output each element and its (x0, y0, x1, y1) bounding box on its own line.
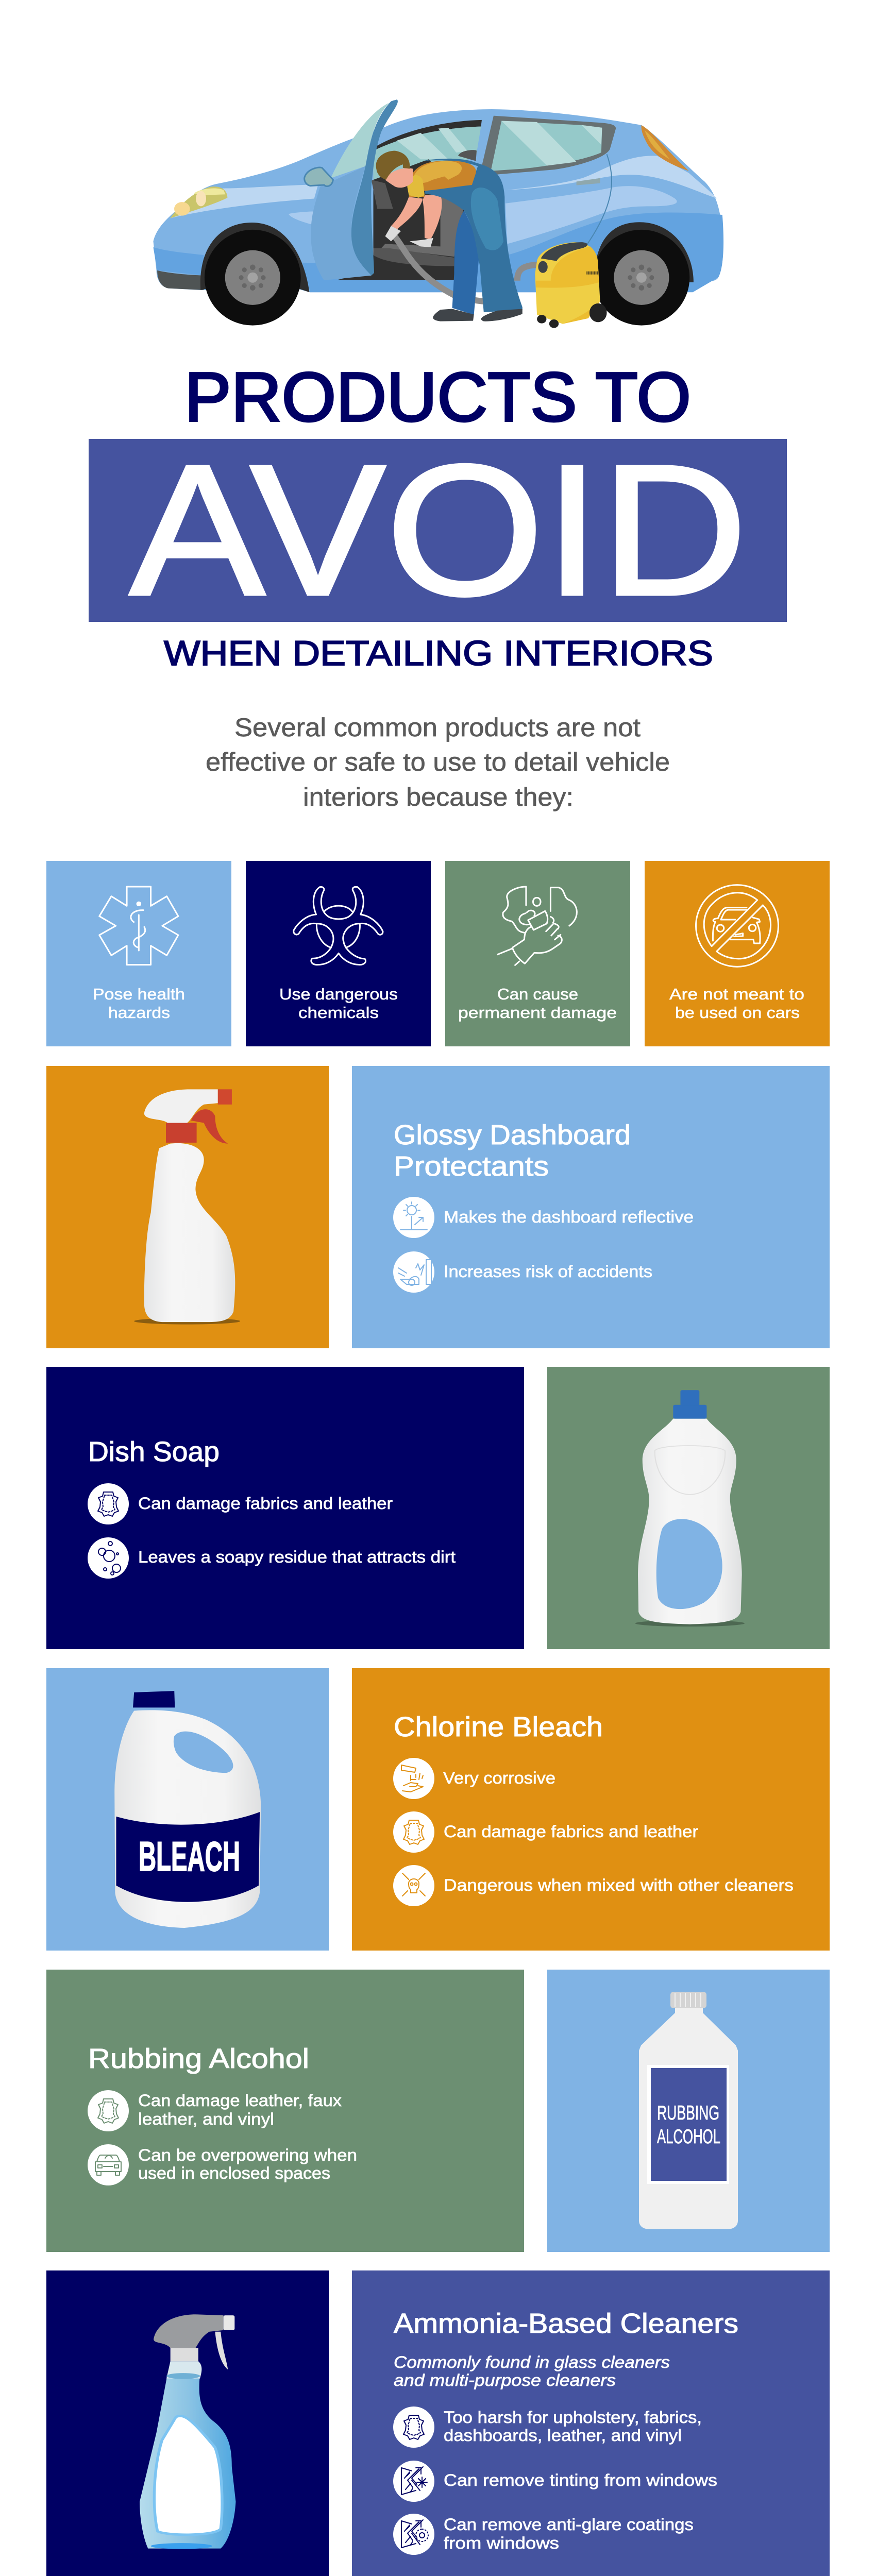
item: too harsh: dashboards, leather, and vinyl (444, 2426, 682, 2445)
item: leather damage (88, 2090, 342, 2131)
panel: pose health hazards (46, 861, 231, 1046)
intro text: interiors because they: (303, 783, 574, 811)
panel: rubbing alcohol (46, 1970, 524, 2252)
panel: ammonia image (46, 2270, 329, 2576)
item: anti-glare (393, 2514, 694, 2555)
panel: glossy dashboard image (46, 1066, 329, 1348)
yellow vacuum (535, 242, 607, 328)
item: leather damage: Can damage leather, faux (138, 2091, 342, 2110)
bottle: blue glass cleaner (140, 2314, 235, 2549)
illustration: worker vacuuming car interior (153, 99, 723, 328)
panel: glossy dashboard protectants: Glossy Dashboard (394, 1120, 631, 1150)
item: fabrics and leather (393, 1811, 698, 1853)
item: reflective (393, 1197, 694, 1238)
item: soapy residue (88, 1537, 456, 1579)
icon: no cars sign (696, 885, 778, 967)
panel: not meant for cars: Are not meant to (669, 985, 804, 1003)
note: where found: Commonly found in glass cleaners (394, 2353, 670, 2371)
panel: glossy dashboard protectants (352, 1066, 830, 1348)
item: fabrics and leather: Can damage fabrics and leather (444, 1822, 698, 1841)
item: accidents (393, 1251, 652, 1293)
panel: rubbing alcohol image (547, 1970, 830, 2252)
note: where found: and multi-purpose cleaners (394, 2371, 616, 2389)
item: anti-glare: from windows (444, 2534, 559, 2552)
item: soapy residue: Leaves a soapy residue that attracts dirt (138, 1548, 456, 1566)
item: mixing danger: Dangerous when mixed with other cleaners (444, 1876, 794, 1894)
item: overpowering: used in enclosed spaces (138, 2164, 330, 2182)
item: fabrics and leather (88, 1483, 393, 1524)
banner: avoid: AVOID (129, 426, 748, 634)
wheels (200, 222, 694, 292)
item: tinting: Can remove tinting from windows (444, 2471, 717, 2489)
intro text: Several common products are not (234, 713, 641, 742)
panel: ammonia-based cleaners (352, 2270, 830, 2576)
panel: dish soap (46, 1367, 524, 1649)
panel: use dangerous chemicals: Use dangerous (279, 985, 398, 1003)
icon: biohazard (294, 887, 383, 965)
panel: not meant for cars (645, 861, 830, 1046)
item: mixing danger (393, 1865, 794, 1906)
panel: chlorine bleach (352, 1668, 830, 1951)
car body (153, 109, 723, 292)
item: corrosive (393, 1758, 555, 1799)
panel: pose health hazards: hazards (108, 1004, 170, 1022)
panel: glossy dashboard protectants: Protectants (394, 1151, 549, 1182)
subheading: when detailing interiors: WHEN DETAILING INTERIORS (164, 634, 713, 673)
bottle: dish soap (635, 1390, 745, 1626)
bottle: bleach jug (114, 1691, 261, 1928)
item: overpowering: Can be overpowering when (138, 2146, 357, 2164)
panel: can cause permanent damage: permanent damage (458, 1004, 617, 1022)
bottle: rubbing alcohol: ALCOHOL (657, 2126, 720, 2148)
item: accidents: Increases risk of accidents (444, 1262, 652, 1281)
note: where found (394, 2353, 670, 2389)
panel: can cause permanent damage: Can cause (497, 985, 578, 1003)
item: fabrics and leather: Can damage fabrics and leather (138, 1494, 393, 1513)
headlight and tail light (170, 187, 227, 218)
bottle: bleach jug: BLEACH (139, 1834, 240, 1880)
item: anti-glare: Can remove anti-glare coatings (444, 2515, 694, 2534)
item: corrosive: Very corrosive (443, 1769, 555, 1787)
panel: dish soap image (547, 1367, 830, 1649)
bottle: rubbing alcohol (639, 1992, 738, 2229)
item: leather damage: leather, and vinyl (138, 2110, 274, 2128)
bottle: red trigger spray (134, 1089, 240, 1325)
icon: star of life (99, 887, 178, 965)
icon: hand scrubbing (498, 887, 577, 965)
item: too harsh: Too harsh for upholstery, fabrics, (444, 2408, 702, 2427)
panel: dish soap: Dish Soap (88, 1436, 220, 1467)
panel: not meant for cars: be used on cars (675, 1004, 800, 1022)
item: tinting (393, 2461, 717, 2502)
panel: use dangerous chemicals (246, 861, 431, 1046)
panel: pose health hazards: Pose health (93, 985, 185, 1003)
panel: rubbing alcohol: Rubbing Alcohol (88, 2043, 309, 2074)
panel: use dangerous chemicals: chemicals (298, 1004, 379, 1022)
heading: products to: PRODUCTS TO (184, 358, 691, 436)
panel: bleach image (46, 1668, 329, 1951)
panel: chlorine bleach: Chlorine Bleach (394, 1711, 603, 1742)
intro text: effective or safe to use to detail vehicle (206, 748, 670, 776)
panel: can cause permanent damage (445, 861, 630, 1046)
open car door (311, 166, 372, 280)
vacuum hose (394, 235, 498, 301)
item: reflective: Makes the dashboard reflective (444, 1208, 694, 1226)
bottle: rubbing alcohol: RUBBING (657, 2102, 719, 2124)
item: too harsh (393, 2406, 702, 2448)
item: overpowering (88, 2144, 357, 2185)
panel: ammonia-based cleaners: Ammonia-Based Cleaners (394, 2308, 738, 2339)
intro text (206, 713, 670, 811)
worker (376, 151, 523, 321)
